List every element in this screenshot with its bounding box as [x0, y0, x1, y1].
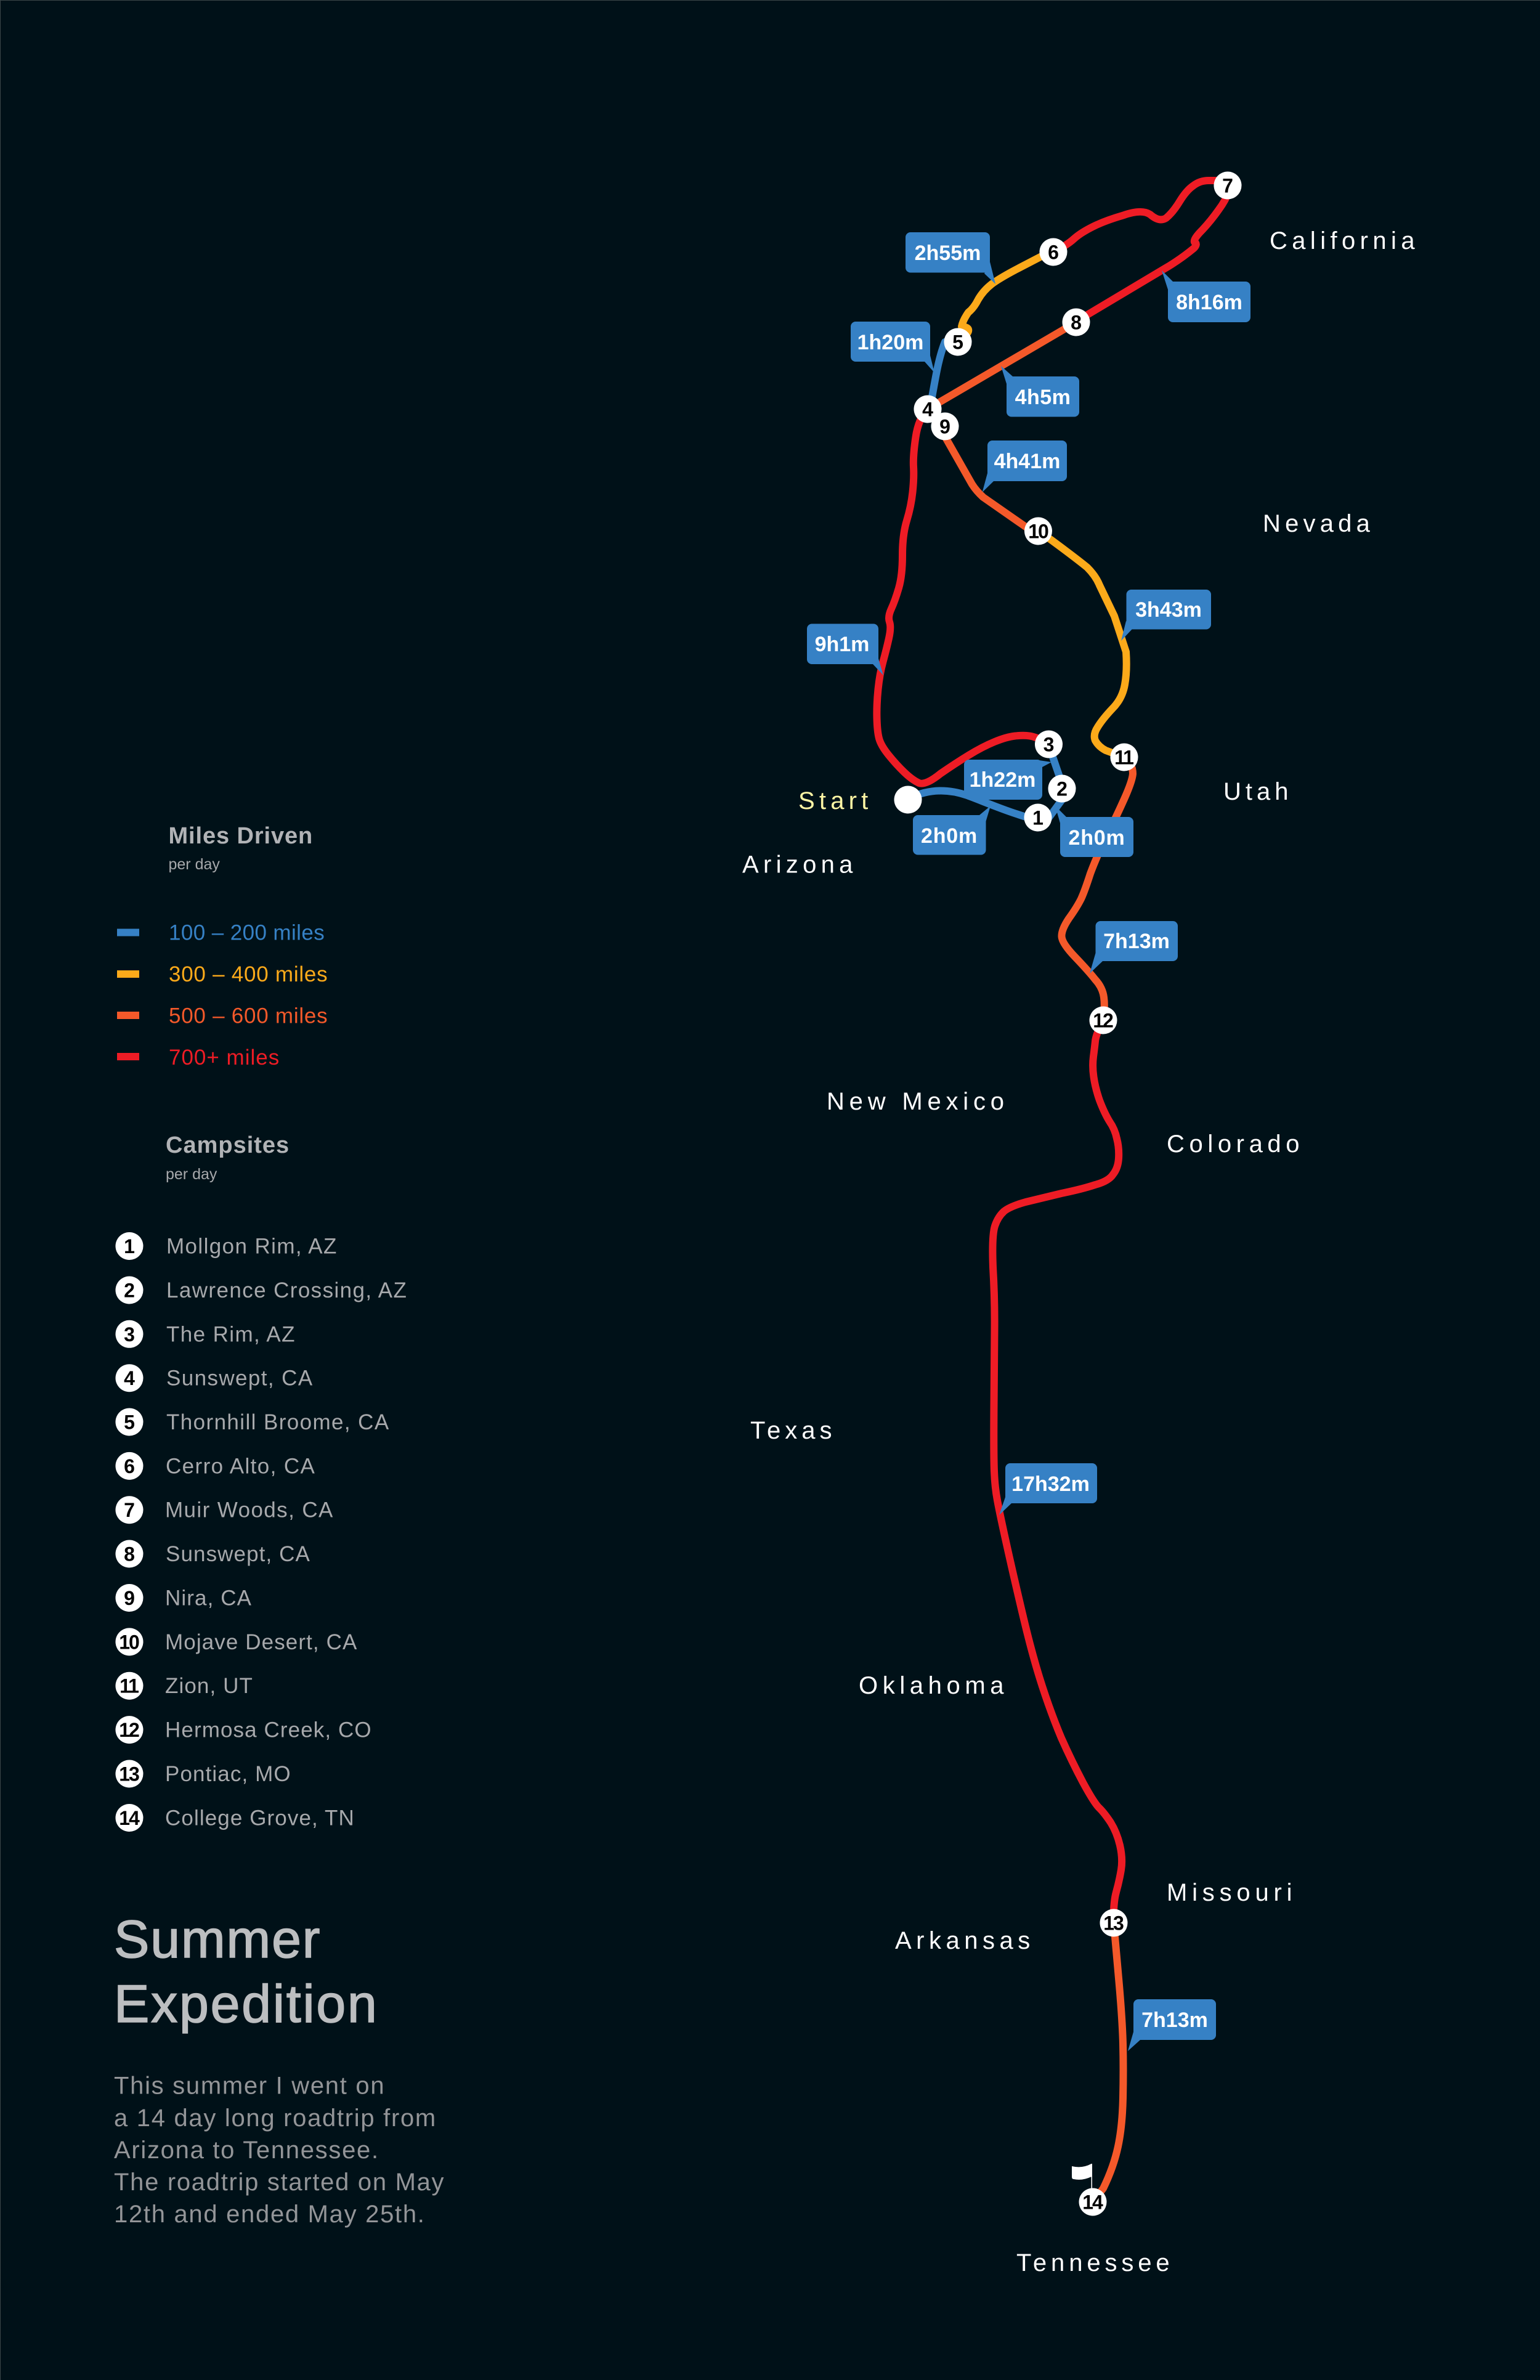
callout: 8h16m: 8h16m — [1176, 291, 1242, 314]
callout: 8h16m — [1162, 270, 1250, 322]
callout: 9h1m: 9h1m — [815, 633, 869, 656]
node 14 — [1079, 2188, 1106, 2216]
callout: 4h41m: 4h41m — [994, 450, 1060, 473]
node 9: 9 — [939, 415, 950, 437]
route: campsite 7 to 8, 700+ miles — [1076, 191, 1229, 322]
legend row: 700+ miles — [117, 1046, 280, 1070]
campsite 4 — [116, 1364, 314, 1392]
callout: 2h55m: 2h55m — [915, 242, 981, 265]
node 14: 14 — [1082, 2191, 1103, 2213]
node 13: 13 — [1103, 1912, 1124, 1935]
node 6: 6 — [1048, 242, 1059, 264]
node 10 — [1024, 518, 1052, 545]
state label: Missouri: Missouri — [1167, 1879, 1297, 1906]
campsite 4: 4 — [124, 1367, 135, 1389]
legend row: 300-400 miles: 300 – 400 miles — [169, 962, 328, 986]
campsite 1 — [116, 1232, 338, 1260]
callout: 7h13m Utah leg — [1090, 921, 1178, 973]
state label: Arizona: Arizona — [742, 851, 857, 879]
body text: The roadtrip started on May — [114, 2169, 445, 2196]
node 9 — [931, 413, 958, 440]
callout: 4h41m — [983, 441, 1067, 492]
start label: Start — [798, 787, 872, 814]
node 11 — [1110, 743, 1138, 771]
state label: Utah: Utah — [1223, 778, 1292, 805]
state label: Oklahoma: Oklahoma — [859, 1672, 1008, 1699]
callout: 7h13m final leg: 7h13m — [1141, 2008, 1208, 2032]
route: campsite 6 to 7, 700+ miles — [1053, 181, 1228, 252]
campsite 7: Muir Woods, CA — [165, 1498, 334, 1522]
callout: 1h22m: 1h22m — [970, 768, 1035, 792]
callout: 1h22m — [964, 760, 1052, 800]
campsite 12: 12 — [119, 1719, 139, 1741]
campsite list — [116, 1132, 407, 1832]
callout: 4h5m — [1001, 366, 1079, 416]
campsite 3: 3 — [124, 1323, 135, 1346]
legend subheading: per day — [169, 856, 220, 873]
state label: Colorado: Colorado — [1167, 1131, 1304, 1158]
node 4: 4 — [922, 398, 933, 420]
node 12: 12 — [1093, 1009, 1113, 1031]
node 1 — [1024, 803, 1052, 832]
route: campsite 10 to 11, 300-400 miles — [1038, 531, 1127, 757]
callout: 3h43m — [1121, 590, 1211, 641]
node 13 — [1100, 1909, 1127, 1937]
node 10: 10 — [1028, 520, 1048, 542]
node 1: 1 — [1032, 807, 1044, 829]
campsite 3 — [116, 1320, 296, 1348]
callout: 2h0m lower right: 2h0m — [1068, 826, 1125, 850]
callout: 17h32m: 17h32m — [1011, 1472, 1090, 1496]
node 8: 8 — [1071, 312, 1082, 334]
campsite 8: 8 — [124, 1543, 135, 1565]
campsite 13: Pontiac, MO — [165, 1762, 291, 1786]
campsite 12 — [116, 1716, 372, 1744]
node 11: 11 — [1114, 747, 1133, 769]
route: campsite 4 to 5, 100-200 miles — [930, 342, 945, 407]
campsite 10: Mojave Desert, CA — [165, 1630, 357, 1654]
node 7 — [1214, 171, 1242, 200]
title: Summer — [114, 1910, 321, 1969]
legend heading: Miles Driven — [169, 823, 313, 849]
node 5 — [944, 328, 972, 356]
callout: 7h13m Utah leg: 7h13m — [1103, 930, 1170, 953]
campsite 9 — [116, 1584, 252, 1612]
node 3 — [1035, 731, 1063, 758]
callout: 1h20m — [851, 322, 934, 373]
callout: 2h55m — [906, 232, 995, 284]
campsite 6 — [116, 1452, 315, 1480]
node 12 — [1089, 1007, 1117, 1034]
state label: Tennessee: Tennessee — [1016, 2249, 1174, 2276]
route: campsite 8 to 9, 500-600 miles — [928, 322, 1076, 409]
start marker — [894, 786, 922, 813]
state label: Texas: Texas — [750, 1417, 837, 1444]
campsite 11 — [116, 1672, 253, 1700]
route: campsite 13 to 14, 500-600 miles — [1093, 1923, 1124, 2202]
state label: California: California — [1270, 227, 1419, 254]
campsite 10: 10 — [119, 1631, 139, 1653]
route: start to campsite 1, 100-200 miles — [910, 790, 1038, 821]
campsite 9: Nira, CA — [165, 1586, 252, 1610]
node 2: 2 — [1056, 778, 1068, 800]
icon: finish flag — [1072, 2164, 1092, 2191]
campsite 5: 5 — [124, 1411, 135, 1433]
route: campsite 9 to 10, 500-600 miles — [942, 426, 1038, 535]
node 6 — [1040, 238, 1067, 266]
route: campsite 3 to 4, 700+ miles — [877, 409, 1048, 784]
campsite 13 — [116, 1760, 291, 1788]
campsite 14 — [116, 1804, 355, 1832]
callout: 2h0m lower left: 2h0m — [921, 824, 978, 848]
campsite 7 — [116, 1496, 334, 1524]
campsite 14: 14 — [119, 1807, 140, 1829]
campsite 9: 9 — [124, 1587, 135, 1609]
legend row: 700+ miles: 700+ miles — [169, 1046, 280, 1070]
node 5: 5 — [952, 331, 963, 354]
node 8 — [1062, 308, 1090, 336]
campsite 6: Cerro Alto, CA — [166, 1454, 315, 1478]
title — [114, 1910, 379, 2034]
callout: 1h20m: 1h20m — [857, 331, 923, 354]
campsite 1: 1 — [124, 1235, 135, 1257]
node 7: 7 — [1222, 175, 1233, 197]
campsite 1: Mollgon Rim, AZ — [166, 1235, 338, 1258]
campsite 11: 11 — [120, 1675, 139, 1697]
body text: Arizona to Tennessee. — [114, 2137, 379, 2164]
campsite 5: Thornhill Broome, CA — [166, 1410, 390, 1434]
legend row: 100-200 miles: 100 – 200 miles — [169, 920, 325, 945]
campsite 14: College Grove, TN — [165, 1806, 355, 1830]
node 2 — [1048, 775, 1076, 802]
campsite 8 — [116, 1540, 310, 1567]
route: campsite 12 to 13, 700+ miles — [992, 1020, 1122, 1923]
campsite 12: Hermosa Creek, CO — [165, 1718, 372, 1742]
campsite 2: 2 — [124, 1279, 135, 1301]
legend: miles driven — [117, 823, 328, 1070]
title: Expedition — [114, 1975, 379, 2034]
campsites subheading: per day — [166, 1166, 217, 1183]
callout: 4h5m: 4h5m — [1015, 386, 1071, 409]
campsite 10 — [116, 1628, 357, 1655]
callout: 9h1m — [807, 623, 883, 675]
callout: 7h13m final leg — [1128, 1999, 1216, 2051]
callout: 17h32m — [999, 1463, 1097, 1515]
campsite 13: 13 — [119, 1763, 139, 1785]
campsite 3: The Rim, AZ — [166, 1322, 296, 1346]
callout: 2h0m lower left — [913, 806, 991, 855]
state label: Arkansas: Arkansas — [895, 1927, 1035, 1954]
body text: a 14 day long roadtrip from — [114, 2105, 437, 2132]
campsite 7: 7 — [124, 1499, 135, 1521]
route map — [742, 171, 1419, 2276]
node 3: 3 — [1044, 733, 1054, 755]
campsite 8: Sunswept, CA — [166, 1542, 310, 1566]
callout: 2h0m lower right — [1055, 806, 1133, 857]
body text — [114, 2073, 445, 2228]
campsite 11: Zion, UT — [165, 1674, 253, 1698]
campsites heading: Campsites — [166, 1132, 290, 1158]
body text: 12th and ended May 25th. — [114, 2201, 426, 2228]
legend row: 500-600 miles: 500 – 600 miles — [169, 1004, 328, 1028]
campsite 6: 6 — [124, 1455, 135, 1477]
campsite 2: Lawrence Crossing, AZ — [166, 1278, 407, 1302]
state label: New Mexico: New Mexico — [827, 1088, 1009, 1115]
node 4 — [914, 396, 941, 423]
route: campsite 1 to 2 to 3, 100-200 miles — [1045, 744, 1066, 822]
campsite 4: Sunswept, CA — [166, 1367, 314, 1391]
route: campsite 11 to 12, 500-600 miles — [1061, 757, 1133, 1020]
callout: 3h43m: 3h43m — [1135, 598, 1202, 622]
route: campsite 5 to 6, 300-400 miles — [962, 250, 1053, 333]
state label: Nevada: Nevada — [1263, 510, 1374, 537]
body text: This summer I went on — [114, 2073, 385, 2100]
